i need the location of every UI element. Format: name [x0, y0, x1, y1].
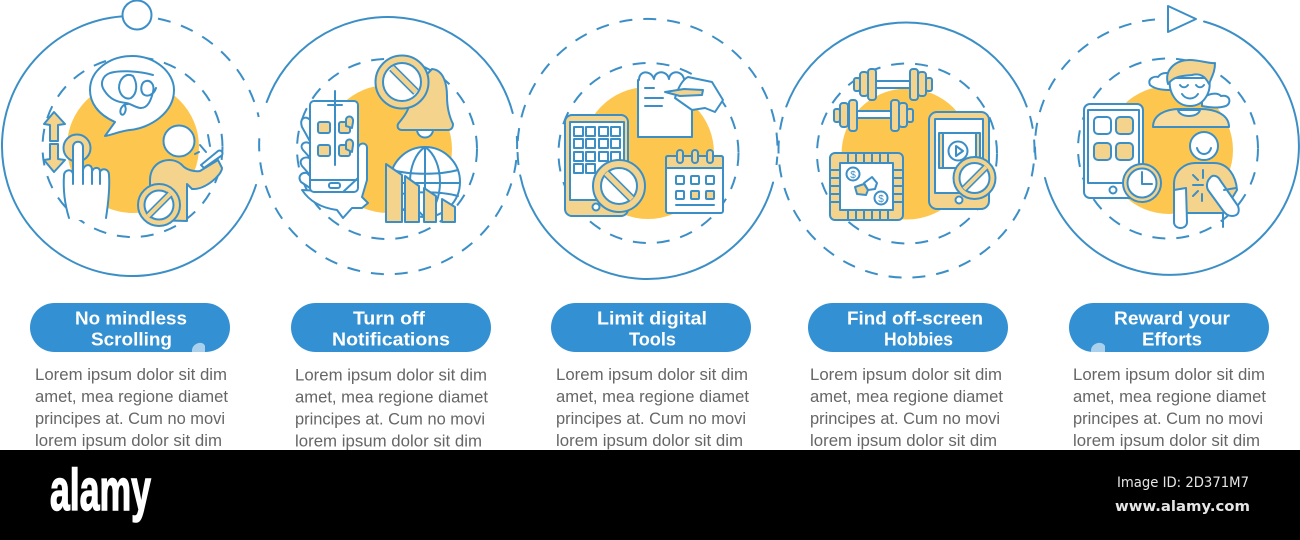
label pill: Turn off Notifications: Turn off	[353, 308, 426, 328]
text block: column 1: amet, mea regione diamet	[35, 388, 228, 406]
text block: column 3	[556, 366, 749, 450]
outer ring 5	[1035, 6, 1299, 275]
icon: dumbbells	[834, 69, 932, 131]
outer ring 4	[778, 22, 1034, 278]
panel: Reward your Efforts	[1035, 6, 1299, 275]
icon: relaxed person in clouds	[1149, 60, 1229, 127]
label pill: Limit digital Tools: Tools	[629, 330, 676, 350]
text block: column 5: principes at. Cum no movi	[1073, 410, 1263, 428]
icon: tablet with clock	[1084, 104, 1161, 202]
text block: column 5: lorem ipsum dolor sit dim	[1073, 432, 1260, 450]
icon: scroll arrows	[44, 112, 65, 172]
label pill: No mindless Scrolling: Scrolling	[91, 330, 172, 350]
label pill: Find off-screen Hobbies	[808, 303, 1008, 352]
icon: notepad and writing hand	[638, 72, 723, 137]
image id: Image ID: 2D371M7	[1117, 475, 1249, 491]
text block: column 5: amet, mea regione diamet	[1073, 388, 1266, 406]
icon: person with blocked gesture	[138, 126, 222, 226]
yellow disc and dashed ring 1	[42, 57, 222, 237]
text block: column 2: lorem ipsum dolor sit dim	[295, 432, 482, 450]
text block: column 3: lorem ipsum dolor sit dim	[556, 432, 743, 450]
text block: column 2	[295, 366, 488, 450]
icon: tablet with app grid	[565, 115, 628, 216]
icon: phone in hand	[300, 91, 368, 218]
text block: column 4: Lorem ipsum dolor sit dim	[810, 366, 1002, 384]
icon: board game: $	[878, 194, 884, 205]
label pill: Limit digital Tools	[551, 303, 751, 352]
panel: Turn off Notifications	[259, 17, 517, 274]
text block: column 4: amet, mea regione diamet	[810, 388, 1003, 406]
text block: column 1: lorem ipsum dolor sit dim	[35, 432, 222, 450]
icon: speech bubble with scribble	[90, 56, 174, 136]
label pill: Turn off Notifications: Notifications	[332, 330, 450, 350]
panel: Limit digital Tools	[518, 19, 778, 279]
text block: column 1: Lorem ipsum dolor sit dim	[35, 366, 227, 384]
text block: column 4: lorem ipsum dolor sit dim	[810, 432, 997, 450]
label pill: No mindless Scrolling	[30, 303, 230, 352]
text block: column 1	[35, 366, 228, 450]
label pill: No mindless Scrolling: No mindless	[75, 308, 187, 328]
panel: No mindless Scrolling	[2, 0, 259, 276]
text block: column 3: amet, mea regione diamet	[556, 388, 749, 406]
icon: phone with video and no sign	[929, 112, 996, 209]
label pill: Reward your Efforts	[1069, 303, 1269, 352]
outer ring 2	[259, 17, 517, 274]
icon: board game: $	[850, 170, 856, 181]
yellow disc and dashed ring 5	[1078, 58, 1258, 238]
website: www.alamy.com	[1115, 499, 1250, 515]
label pill: Reward your Efforts: Reward your	[1114, 308, 1230, 328]
label pill: Limit digital Tools: Limit digital	[597, 308, 707, 328]
text block: column 5	[1073, 366, 1266, 450]
label pill: Turn off Notifications	[291, 303, 491, 352]
label pill: Reward your Efforts: Efforts	[1142, 330, 1202, 350]
text block: column 1: principes at. Cum no movi	[35, 410, 225, 428]
icon: person patting themselves	[1174, 132, 1239, 228]
icon: tapping hand	[64, 134, 109, 220]
icon: crossed bell	[376, 56, 453, 138]
yellow disc and dashed ring 2	[297, 59, 477, 239]
text block: column 5: Lorem ipsum dolor sit dim	[1073, 366, 1265, 384]
yellow disc and dashed ring 3	[558, 63, 738, 243]
text block: column 4: principes at. Cum no movi	[810, 410, 1000, 428]
panel: Find off-screen Hobbies	[778, 22, 1034, 278]
text block: column 2: principes at. Cum no movi	[295, 410, 485, 428]
icon: globe and falling bars	[386, 147, 460, 222]
footer band	[0, 450, 1300, 540]
outer ring 1	[2, 0, 259, 276]
icon: calendar	[666, 150, 723, 213]
icon: board game	[830, 153, 903, 220]
logo: alamy: alamy	[50, 458, 151, 523]
text block: column 2: amet, mea regione diamet	[295, 388, 488, 406]
label pill: Find off-screen Hobbies: Find off-screen	[847, 308, 983, 328]
icon: no sign on tablet	[593, 160, 645, 212]
label pill: Find off-screen Hobbies: Hobbies	[884, 330, 953, 350]
text block: column 3: Lorem ipsum dolor sit dim	[556, 366, 748, 384]
outer ring 3	[518, 19, 778, 279]
yellow disc and dashed ring 4	[817, 64, 997, 244]
text block: column 3: principes at. Cum no movi	[556, 410, 746, 428]
text block: column 4	[810, 366, 1003, 450]
text block: column 2: Lorem ipsum dolor sit dim	[295, 366, 487, 384]
